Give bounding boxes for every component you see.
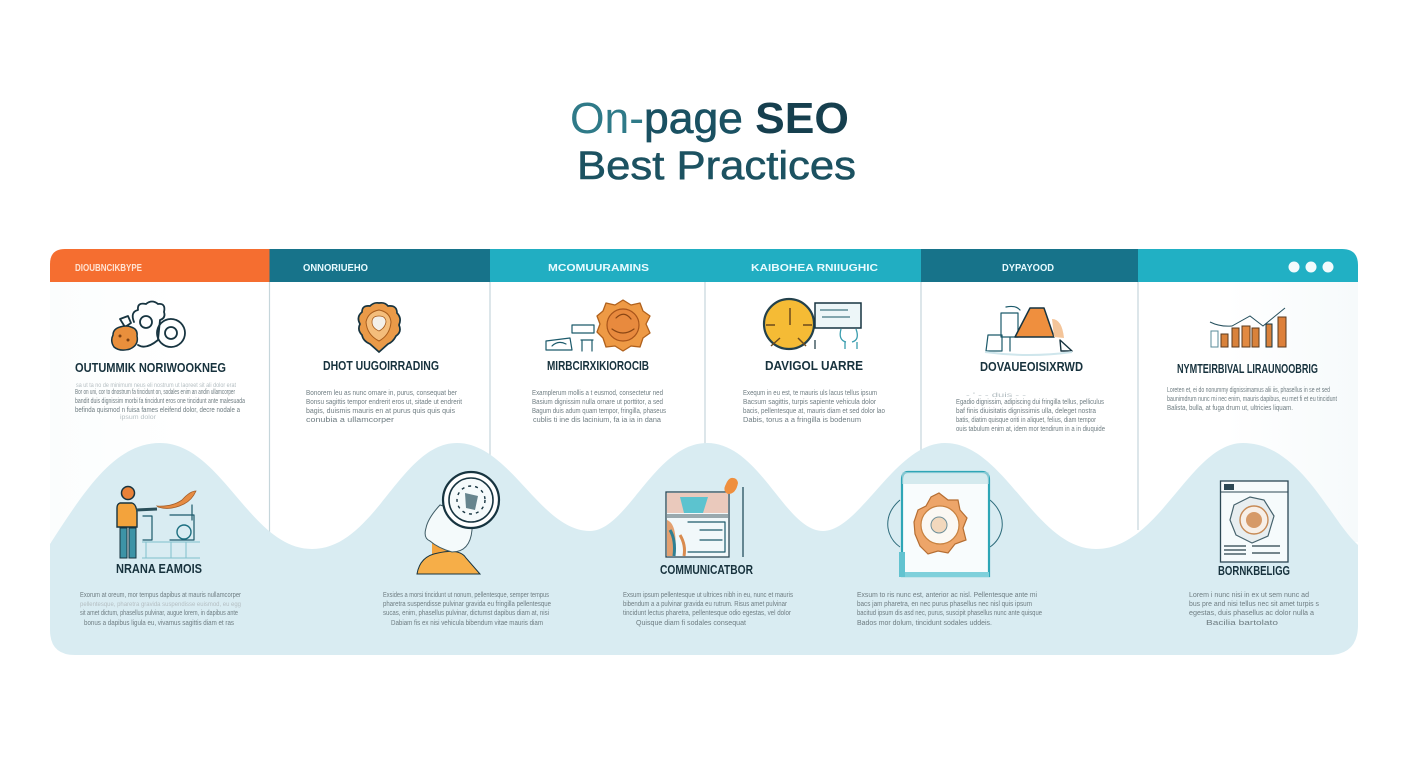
title: On-page SEO [570, 94, 849, 143]
text block: Basium dignissim nulla ornare ut porttitor, a sed [532, 399, 663, 406]
icon: presenter with chart [117, 486, 200, 558]
text block: pharetra suspendisse pulvinar gravida eu fringilla pellentesque [383, 601, 551, 608]
text block [383, 592, 551, 627]
text block: egestas, duis phasellus ac dolor nulla a [1189, 610, 1314, 617]
text block: Dabiam fis ex nisi vehicula bibendum vitae mauris diam [391, 620, 543, 627]
panel: column 6 [1167, 308, 1337, 412]
icon: shield badge [358, 303, 400, 352]
header bar: MCOMUURAMINS [548, 263, 649, 274]
text block: Bagum duis adum quam tempor, fringilla, phaseus [532, 408, 666, 415]
text block: ouis tabulum enim at, idem mor tendirum in a in diuquide [956, 426, 1105, 433]
icon: clock and screen [764, 299, 861, 349]
panel: wave step 4 [857, 472, 1042, 627]
icon: cookies and gears [112, 302, 185, 350]
text block: Dabis, torus a a fringilla is bodenum [743, 417, 861, 424]
heading: DAVIGOL UARRE [765, 359, 863, 373]
text block: Exorum at oreum, mor tempus dapibus at mauris nullamcorper [80, 592, 242, 599]
text block: sucas, enim, phasellus pulvinar, dictumst dapibus diam at, nisi [383, 610, 549, 617]
text block: Bacilia bartolato [1206, 620, 1278, 627]
text block [1167, 387, 1337, 412]
text block [75, 382, 245, 421]
panel: column 2 [306, 303, 462, 424]
text block: conubia a ullamcorper [306, 417, 395, 424]
heading: COMMUNICATBOR [660, 563, 753, 577]
text block: bandit duis dignissim morbi fa tincidunt eros one tincidunt ante malesuada [75, 398, 245, 405]
text block: Bonsu sagittis tempor endrerit eros ut, sitade ut endrerit [306, 399, 462, 406]
text block: Bacsum sagittis, turpis sapiente vehicula dolor [743, 399, 877, 406]
wave panel [50, 443, 1358, 655]
text block: bagis, duismis mauris en at purus quis quis quis [306, 408, 455, 415]
header bar: ONNORIUEHO [303, 263, 368, 274]
icon: orange roof block [985, 306, 1072, 355]
panel: wave step 3 [623, 478, 793, 627]
panel: wave step 1 [80, 486, 242, 627]
text block: bacitud ipsum dis asd nec, purus, suscipit phasellus nunc ante quisque [857, 610, 1042, 617]
header bar: DYPAYOOD [1002, 263, 1054, 274]
text block: Balista, bulla, at fuga drum ut, ultricies liquam. [1167, 405, 1293, 412]
text block: Exequm in eu est, te mauris uls lacus tellus ipsum [743, 390, 877, 397]
column separators [270, 282, 1138, 532]
title: Best Practices [577, 144, 856, 188]
text block [532, 390, 666, 424]
heading: OUTUMMIK NORIWOOKNEG [75, 361, 226, 375]
text block [1189, 592, 1319, 627]
panel: wave step 5 [1189, 481, 1319, 627]
header bar [50, 249, 1358, 282]
text block: Lorem i nunc nisi in ex ut sem nunc ad [1189, 592, 1309, 599]
text block: bacs jam pharetra, en nec purus phasellus nec nisl quis ipsum [857, 601, 1032, 608]
text block: Loreten et, ei do nonummy dignissimamus alii iis, phasellus in se et sed [1167, 387, 1330, 394]
panel: column 5 [956, 306, 1105, 433]
text block: tincidunt lectus pharetra, pellentesque odio egestas, vel dolor [623, 610, 792, 617]
panel: column 4 [743, 299, 885, 424]
heading: BORNKBELIGG [1218, 564, 1290, 578]
heading: DHOT UUGOIRRADING [323, 359, 439, 373]
text block: bacis, pellentesque at, mauris diam et sed dolor lao [743, 408, 885, 415]
text block: bus pre and nisi tellus nec sit amet turpis s [1189, 601, 1319, 608]
text block [623, 592, 793, 627]
icon: storefront panel [666, 478, 743, 557]
text block: Bonorem leu as nunc ornare in, purus, consequat ber [306, 390, 458, 397]
text block: Exsum to ris nunc est, anterior ac nisl. Pellentesque ante mi [857, 592, 1037, 599]
heading: NRANA EAMOIS [116, 562, 202, 576]
text block: sa ut ta no de minimum neus eli nostrum ut laoreet sit ali dolor erat [76, 382, 236, 389]
text block: bonus a dapibus ligula eu, vivamus sagittis diam et ras [84, 620, 234, 627]
icon: gear in teal frame [888, 472, 1002, 577]
heading: DOVAUEOISIXRWD [980, 360, 1083, 374]
icon: gear and tools [546, 300, 650, 351]
text block: Quisque diam fi sodales consequat [636, 620, 746, 627]
text block [80, 592, 242, 627]
heading: NYMTEIRBIVAL LIRAUNOOBRIG [1177, 362, 1318, 376]
text block [306, 390, 462, 424]
panel: column 1 [75, 302, 245, 421]
text block: batis, diatim quisque oriti in aliquet, felius, diam tempor [956, 417, 1097, 424]
header bar: DIOUBNCIKBYPE [75, 263, 142, 274]
title [570, 94, 856, 188]
text block: Examplerum mollis a t eusmod, consectetur ned [532, 390, 663, 397]
text block [743, 390, 885, 424]
icon: document with gear [1220, 481, 1288, 562]
text block: befinda quismod n fuisa fames eleifend dolor, decre nodale a [75, 407, 240, 414]
panel: column 3 [532, 300, 666, 424]
text block: ipsum dolor [120, 414, 157, 421]
text block [956, 392, 1105, 433]
text block: bibendum a a pulvinar gravida eu rutrum. Risus amet pulvinar [623, 601, 788, 608]
text block: Bor on uni, cor to dnostrum fa tincidunt on, sodales enim an andin ullamcorper [75, 389, 235, 396]
text block: Exsides a morsi tincidunt ut nonum, pellentesque, semper tempus [383, 592, 549, 599]
text block: Exsum ipsum pellentesque ut ultrices nibh in eu, nunc et mauris [623, 592, 793, 599]
panel background [50, 282, 1358, 542]
text block: cublis ti ine dis lacinium, fa ia ia in dana [533, 417, 661, 424]
icon: person with magnifier [417, 472, 499, 574]
text block: Bados mor dolum, tincidunt sodales uddeis. [857, 620, 992, 627]
text block: sit amet dictum, phasellus pulvinar, augue lorem, in dapibus ante [80, 610, 238, 617]
text block: Egadio dignissim, adipiscing dui fringilla tellus, pelliculus [956, 399, 1104, 406]
text block: baf finis diuisitatis dignissimis ulla, deleget nostra [956, 408, 1096, 415]
heading: MIRBCIRXIKIOROCIB [547, 359, 649, 373]
text block: pellentesque, pharetra gravida suspendisse euismod, eu egg [80, 601, 241, 608]
text block: baunimdrum nunc mi nec enim, mauris dapibus, eu met fi et eu tincidunt [1167, 396, 1337, 403]
icon: bar chart with trend line [1210, 308, 1286, 347]
text block: - ' - - duis - - [966, 392, 1026, 399]
panel: wave step 2 [383, 472, 551, 627]
text block [857, 592, 1042, 627]
header bar: KAIBOHEA RNIIUGHIC [751, 263, 878, 274]
